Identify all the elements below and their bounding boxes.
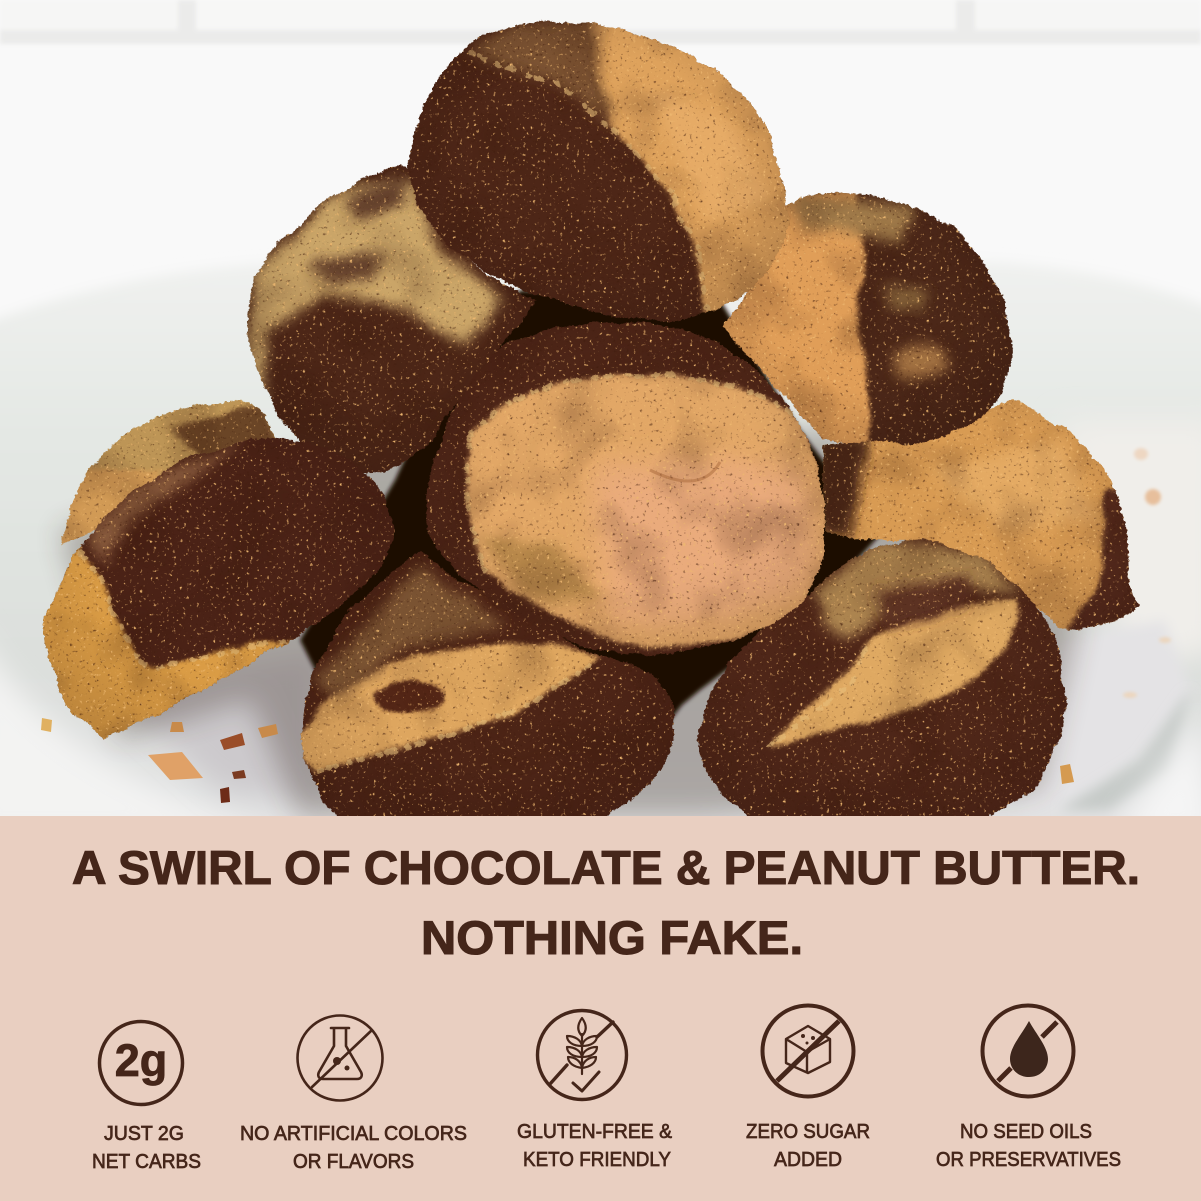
label: no seed oils or preservatives: NO SEED OILS xyxy=(960,1121,1092,1143)
photo: stacked chocolate peanut butter cookies on a plate xyxy=(0,0,1201,840)
icon: crossed-out wheat with check xyxy=(538,1010,626,1100)
label: no artificial colors or flavors xyxy=(240,1123,467,1173)
icon: crossed-out oil drop xyxy=(982,1006,1074,1096)
feature: zero sugar xyxy=(746,1006,870,1171)
cookie: far left back xyxy=(60,401,275,550)
dark gaps between cookies xyxy=(300,290,880,760)
heading xyxy=(72,841,1140,964)
plate xyxy=(0,262,1201,840)
icon: 2g circle xyxy=(100,1022,182,1104)
cookie: upper right xyxy=(700,190,1012,445)
label: zero sugar added: ZERO SUGAR xyxy=(746,1121,870,1143)
label: zero sugar added xyxy=(746,1121,870,1171)
label: no seed oils or preservatives: OR PRESERVATIVES xyxy=(936,1149,1121,1171)
wall tiles xyxy=(0,0,1201,44)
label: gluten-free and keto friendly: KETO FRIENDLY xyxy=(523,1149,671,1171)
icon: crossed-out flask xyxy=(298,1016,382,1100)
label: no seed oils or preservatives xyxy=(936,1121,1121,1171)
icon: 2g circle: 2g xyxy=(115,1035,167,1086)
cookie: bottom right xyxy=(698,540,1065,825)
label: just 2g net carbs: NET CARBS xyxy=(92,1151,201,1173)
label: no artificial colors or flavors: NO ARTIFICIAL COLORS xyxy=(240,1123,467,1145)
cookie: far right xyxy=(815,400,1150,640)
label: zero sugar added: ADDED xyxy=(774,1149,842,1171)
label: gluten-free and keto friendly xyxy=(517,1121,673,1171)
feature: 2g net carbs xyxy=(92,1022,201,1173)
shadow under cookies xyxy=(60,430,1080,816)
panel: text band xyxy=(0,816,1201,1201)
heading: A SWIRL OF CHOCOLATE & PEANUT BUTTER. xyxy=(72,841,1140,894)
cookie: bottom centre xyxy=(295,552,676,825)
cookie: upper left xyxy=(240,166,535,472)
cookie: centre front xyxy=(426,322,840,655)
crease in centre cookie xyxy=(650,462,720,481)
label: just 2g net carbs: JUST 2G xyxy=(104,1123,184,1145)
background wall xyxy=(0,0,1201,324)
cookie: top xyxy=(408,10,800,330)
heading: NOTHING FAKE. xyxy=(421,911,803,964)
crumbs on the plate xyxy=(41,448,1171,803)
feature: gluten-free and keto xyxy=(517,1010,673,1171)
icon: crossed-out sugar cube xyxy=(762,1006,854,1096)
label: no artificial colors or flavors: OR FLAVORS xyxy=(293,1151,414,1173)
feature: no artificial colors xyxy=(240,1016,467,1173)
feature: no seed oils xyxy=(936,1006,1121,1171)
label: just 2g net carbs xyxy=(92,1123,201,1173)
cookie: left front xyxy=(35,439,395,750)
label: gluten-free and keto friendly: GLUTEN-FREE & xyxy=(517,1121,673,1143)
